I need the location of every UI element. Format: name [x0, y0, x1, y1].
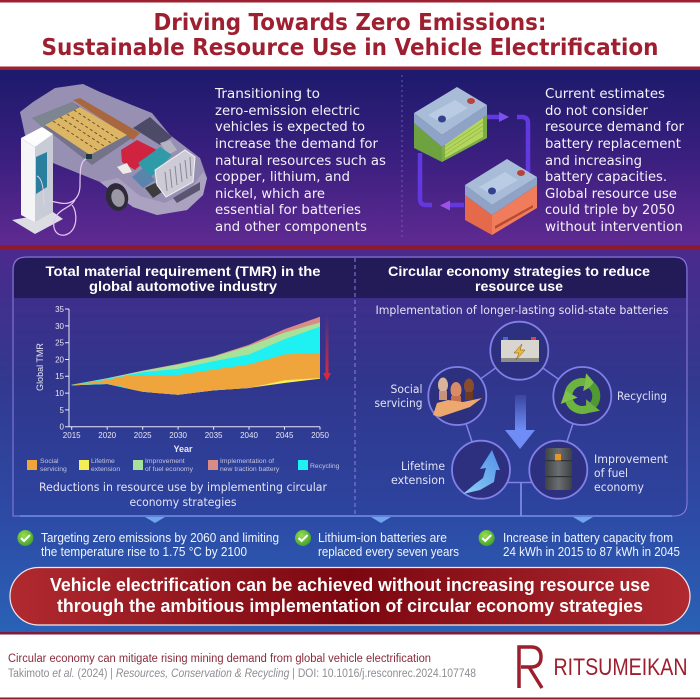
assumption: battery capacity	[479, 530, 680, 559]
y-axis labels: 15	[55, 372, 65, 381]
x-axis labels: 2040	[240, 431, 258, 440]
icon: social servicing people and hand	[428, 367, 486, 425]
y-axis labels: 35	[55, 305, 65, 314]
chart caption: Reductions in resource use by implementing circular	[39, 480, 327, 494]
label: social servicing	[374, 382, 422, 410]
text block: current estimates: do not consider	[545, 104, 649, 119]
icon: battery	[490, 322, 548, 380]
area: social servicing	[72, 353, 320, 395]
label: improvement of fuel economy	[594, 452, 668, 494]
text block: demand for natural resources: essential for batteries	[215, 203, 361, 218]
arrow: reduction	[323, 316, 331, 381]
subheading: solid-state batteries: Implementation of longer-lasting solid-state batteries	[376, 303, 668, 317]
panel: findings frame	[13, 257, 687, 523]
heading: total material requirement: Total material requirement (TMR) in the	[46, 263, 321, 279]
x-axis title: Year	[173, 444, 193, 454]
text block: demand for natural resources: vehicles is expected to	[215, 120, 365, 135]
area: recycling	[72, 327, 320, 395]
title banner	[0, 0, 700, 70]
area: implementation of new traction battery	[72, 317, 320, 395]
label: lifetime extension	[391, 459, 445, 487]
legend: Social	[40, 458, 59, 465]
heading: circular economy strategies	[388, 263, 650, 294]
legend: servicing	[40, 466, 67, 473]
text block: demand for natural resources: natural resources such as	[215, 154, 386, 169]
x-axis labels: 2020	[98, 431, 117, 440]
y-axis labels	[55, 305, 65, 432]
logo: Ritsumeikan	[519, 647, 688, 688]
heading: circular economy strategies: Circular economy strategies to reduce	[388, 263, 650, 279]
y-axis labels: 20	[55, 356, 65, 364]
icon: fuel drum	[529, 441, 587, 499]
callout: conclusion	[10, 568, 690, 625]
text block: demand for natural resources: nickel, which are	[215, 187, 325, 202]
heading: total material requirement: global automotive industry	[89, 278, 277, 294]
chart: global TMR stacked area	[35, 305, 331, 454]
chart caption	[39, 480, 327, 509]
legend: Lifetime	[91, 458, 115, 465]
label: social servicing: Social	[390, 382, 422, 396]
assumption: zero emissions target: Targeting zero emissions by 2060 and limiting	[41, 530, 279, 545]
label: recycling: Recycling	[617, 389, 667, 403]
assumption: battery replacement: replaced every seven years	[318, 544, 459, 559]
x-axis labels: 2035	[205, 431, 223, 440]
callout: conclusion: Vehicle electrification can be achieved without increasing resource use	[50, 574, 650, 595]
icon: green and orange batteries with cycle arrows	[414, 87, 537, 235]
text block: current estimates: Global resource use	[545, 187, 677, 202]
icon: lifetime extension arrow	[452, 441, 510, 499]
arrow: central down arrow	[505, 395, 535, 449]
text block: demand for natural resources	[214, 87, 386, 235]
heading: circular economy strategies: resource use	[475, 278, 563, 294]
x-axis labels: 2045	[276, 431, 294, 440]
panel: introduction band	[0, 70, 700, 250]
legend: Improvement	[145, 458, 185, 465]
text block: demand for natural resources: Transitioning to	[214, 87, 320, 102]
x-axis labels: 2050	[311, 431, 329, 440]
legend: new traction battery	[220, 466, 280, 473]
text block: demand for natural resources: zero-emission electric	[215, 104, 360, 119]
icon: recycling	[553, 367, 611, 425]
x-axis labels: 2030	[169, 431, 188, 440]
text block: demand for natural resources: increase the demand for	[215, 137, 379, 152]
text block: current estimates: without intervention	[545, 220, 683, 235]
legend	[27, 458, 340, 473]
assumption: zero emissions target: the temperature rise to 1.75 °C by 2100	[41, 544, 247, 559]
label: lifetime extension: Lifetime	[401, 459, 445, 473]
legend: Implementation of	[220, 458, 274, 465]
assumption: battery capacity: 24 kWh in 2015 to 87 kWh in 2045	[503, 544, 680, 559]
panel: main background	[0, 250, 700, 634]
area: lifetime extension	[249, 370, 320, 388]
chart caption: economy strategies	[130, 495, 236, 509]
label: social servicing: servicing	[374, 396, 422, 410]
x-axis labels	[63, 431, 329, 440]
text block: current estimates: could triple by 2050	[545, 203, 675, 218]
citation details: Takimoto et al. (2024) | Resources, Conservation & Recycling | DOI: 10.1016/j.resconrec.2024.107748	[8, 668, 476, 680]
area: improvement of fuel economy	[72, 322, 320, 395]
title: Driving Towards Zero Emissions:	[154, 10, 546, 36]
y-axis labels: 30	[55, 322, 65, 331]
diagram: circular economy strategies	[374, 322, 668, 499]
icon: electric car with battery and charging station	[12, 84, 207, 235]
assumption: battery replacement	[295, 530, 459, 559]
label: improvement of fuel economy: economy	[594, 480, 644, 494]
text block: current estimates: and increasing	[545, 154, 642, 169]
y-axis labels: 10	[55, 389, 65, 398]
text block: current estimates: Current estimates	[545, 87, 665, 102]
y-axis labels: 25	[55, 338, 65, 348]
label: improvement of fuel economy: of fuel	[594, 466, 628, 480]
legend: of fuel economy	[145, 466, 194, 473]
text block: demand for natural resources: and other components	[215, 220, 367, 235]
assumption: battery replacement: Lithium-ion batteries are	[318, 530, 447, 545]
footer	[0, 632, 700, 700]
text block: current estimates: battery capacities.	[545, 170, 667, 185]
x-axis labels: 2015	[63, 431, 81, 440]
subtitle: Sustainable Resource Use in Vehicle Electrification	[42, 35, 658, 61]
text block: current estimates	[545, 87, 685, 235]
axes	[65, 309, 320, 430]
y-axis labels: 5	[60, 406, 65, 415]
assumption: battery capacity: Increase in battery capacity from	[503, 530, 673, 545]
heading: total material requirement	[46, 263, 321, 294]
callout: conclusion: through the ambitious implementation of circular economy strategies	[57, 595, 643, 616]
y-axis labels: 0	[60, 422, 65, 432]
text block: current estimates: resource demand for	[545, 120, 685, 135]
text block: demand for natural resources: copper, lithium, and	[215, 170, 350, 185]
label: improvement of fuel economy: Improvement	[594, 452, 668, 466]
citation title: Circular economy can mitigate rising mining demand from global vehicle electrification	[8, 653, 431, 665]
text block: current estimates: battery replacement	[545, 137, 681, 152]
assumption: zero emissions target	[17, 530, 279, 559]
y-axis title: Global TMR	[35, 343, 45, 391]
label: lifetime extension: extension	[391, 473, 445, 487]
x-axis labels: 2025	[134, 431, 152, 440]
legend: extension	[91, 466, 120, 473]
legend: Recycling	[310, 463, 340, 470]
